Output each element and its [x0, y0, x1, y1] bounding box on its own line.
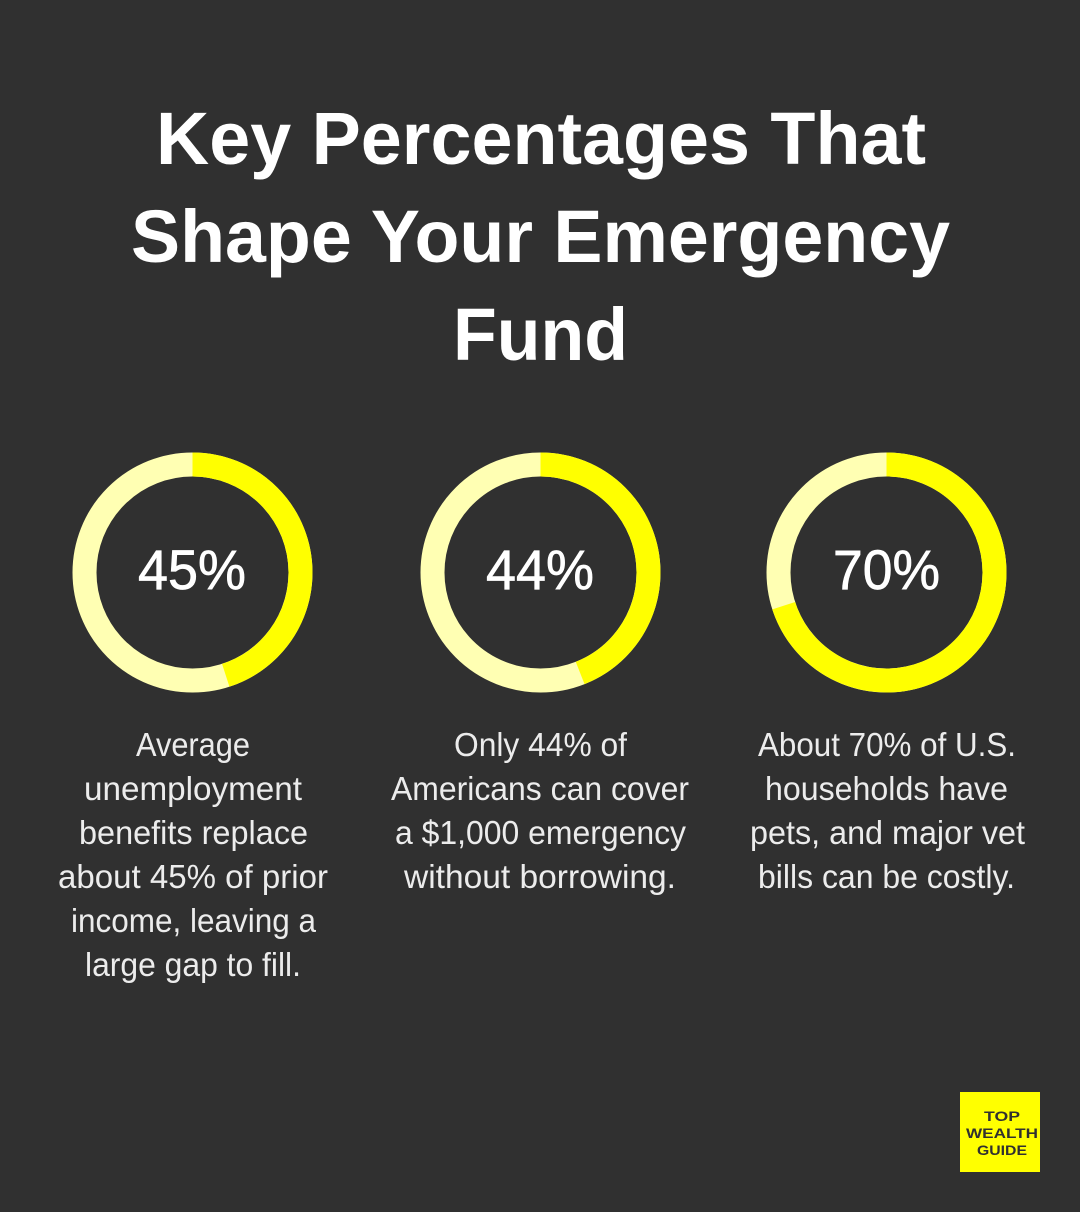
value: 45%: 45% — [138, 538, 246, 601]
description: unemployment benefits: large gap to fill. — [85, 946, 301, 983]
description: unemployment benefits: benefits replace — [79, 814, 308, 851]
panel: 44% statistic — [391, 464, 689, 895]
description: emergency coverage: a $1,000 emergency — [395, 814, 686, 851]
donut chart: 44% — [432, 464, 648, 680]
description: pet households: pets, and major vet — [750, 814, 1025, 851]
donut chart: 45% — [84, 464, 300, 680]
logo: Top Wealth Guide: GUIDE — [977, 1143, 1027, 1158]
description: pet households — [750, 726, 1025, 895]
title: Shape Your Emergency — [131, 195, 950, 278]
logo: Top Wealth Guide — [960, 1092, 1040, 1172]
logo: Top Wealth Guide: TOP — [984, 1109, 1020, 1124]
description: pet households: households have — [765, 770, 1008, 807]
panel: 70% statistic — [750, 464, 1025, 895]
description: unemployment benefits: unemployment — [84, 770, 302, 807]
description: emergency coverage — [391, 726, 689, 895]
panel: 45% statistic — [58, 464, 328, 983]
title: Key Percentages That — [156, 97, 926, 180]
description: pet households: About 70% of U.S. — [758, 726, 1016, 763]
description: emergency coverage: Only 44% of — [454, 726, 628, 763]
description: pet households: bills can be costly. — [758, 858, 1015, 895]
value: 44%: 44% — [486, 538, 594, 601]
description: unemployment benefits: about 45% of prior — [58, 858, 328, 895]
logo: Top Wealth Guide: WEALTH — [966, 1126, 1038, 1141]
description: unemployment benefits: income, leaving a — [71, 902, 317, 939]
description: emergency coverage: without borrowing. — [403, 858, 676, 895]
title: Fund — [453, 293, 628, 376]
title — [131, 97, 950, 376]
value: 70%: 70% — [833, 538, 940, 601]
description: unemployment benefits — [58, 726, 328, 983]
description: unemployment benefits: Average — [136, 726, 250, 763]
description: emergency coverage: Americans can cover — [391, 770, 689, 807]
donut chart: 70% — [778, 464, 994, 680]
